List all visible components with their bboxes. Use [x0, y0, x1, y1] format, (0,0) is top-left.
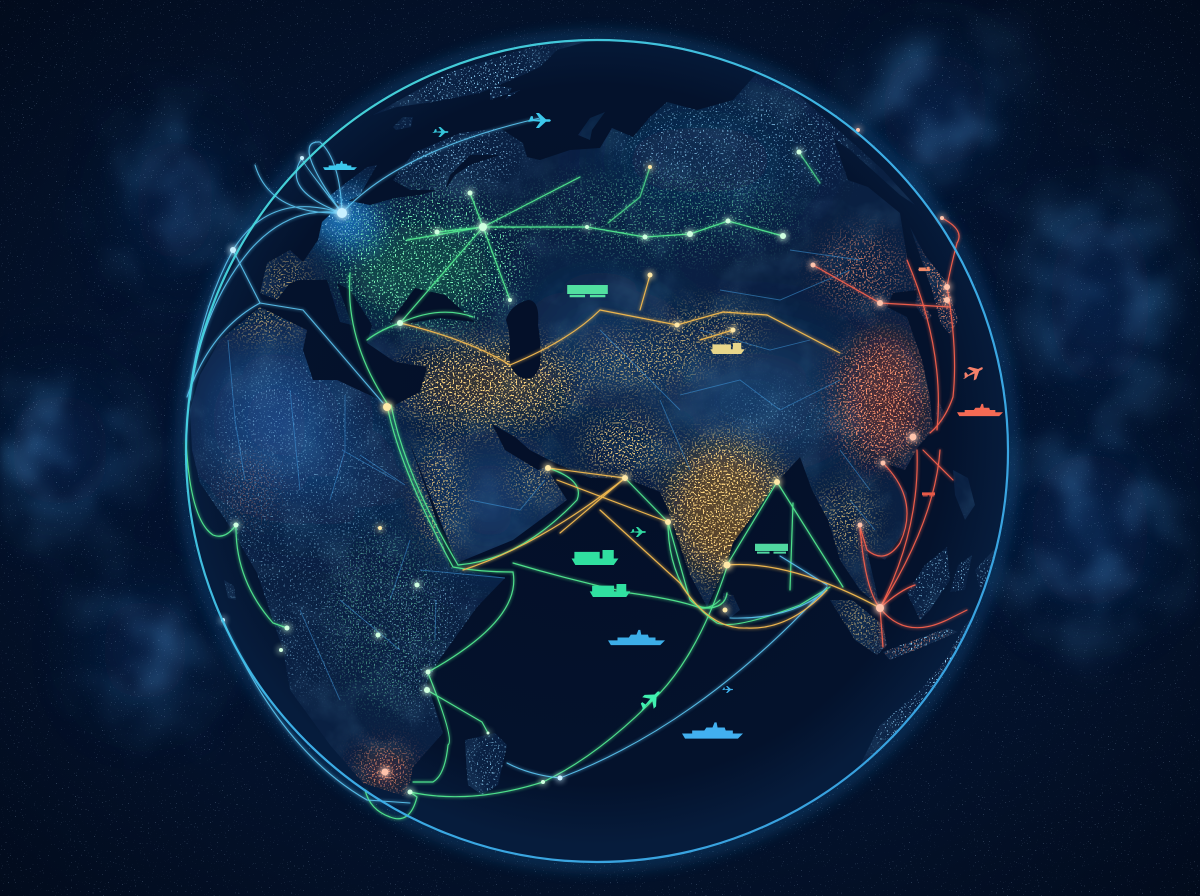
- icon: green cargo ship, Arabian Sea: [572, 550, 618, 565]
- route nodes: [221, 128, 950, 794]
- routes: green network: [186, 152, 843, 819]
- icon: salmon plane, Pacific: [959, 362, 986, 385]
- routes: orange: [400, 275, 880, 628]
- globe land masses: [190, 41, 995, 796]
- icon: blue ship, Indian Ocean: [608, 630, 665, 645]
- icon: small cyan plane, north: [432, 127, 448, 137]
- country borders: [228, 250, 875, 700]
- icon: red ship, east Asia: [918, 267, 931, 271]
- trade routes: [186, 118, 967, 819]
- icon: green train, Bay of Bengal: [755, 544, 788, 554]
- icon: yellow ship, central Asia: [710, 343, 745, 354]
- inland seas: [390, 288, 548, 470]
- routes: red: [813, 218, 967, 647]
- icon: small blue plane, Indian Ocean: [722, 686, 733, 693]
- globe rim highlight: [186, 40, 1008, 862]
- routes: cyan and blue: [186, 118, 827, 803]
- icon: red ship, Pacific: [957, 404, 1003, 416]
- icon: blue ship, southern Indian Ocean: [682, 722, 743, 739]
- icon: cyan plane, north: [526, 113, 551, 128]
- icon: green train, central Asia: [567, 285, 608, 297]
- icon: green cargo ship, Indian Ocean: [590, 584, 630, 597]
- vehicle icons: [323, 113, 1003, 739]
- globe ocean: [186, 40, 1008, 862]
- icon: cyan ship, north Atlantic: [323, 161, 357, 170]
- globe outer atmosphere glow: [184, 38, 1010, 864]
- icon: green plane, Indian Ocean: [635, 686, 665, 716]
- icon: red train, Pacific: [922, 492, 935, 496]
- icon: small green plane, Arabian Sea: [630, 527, 646, 537]
